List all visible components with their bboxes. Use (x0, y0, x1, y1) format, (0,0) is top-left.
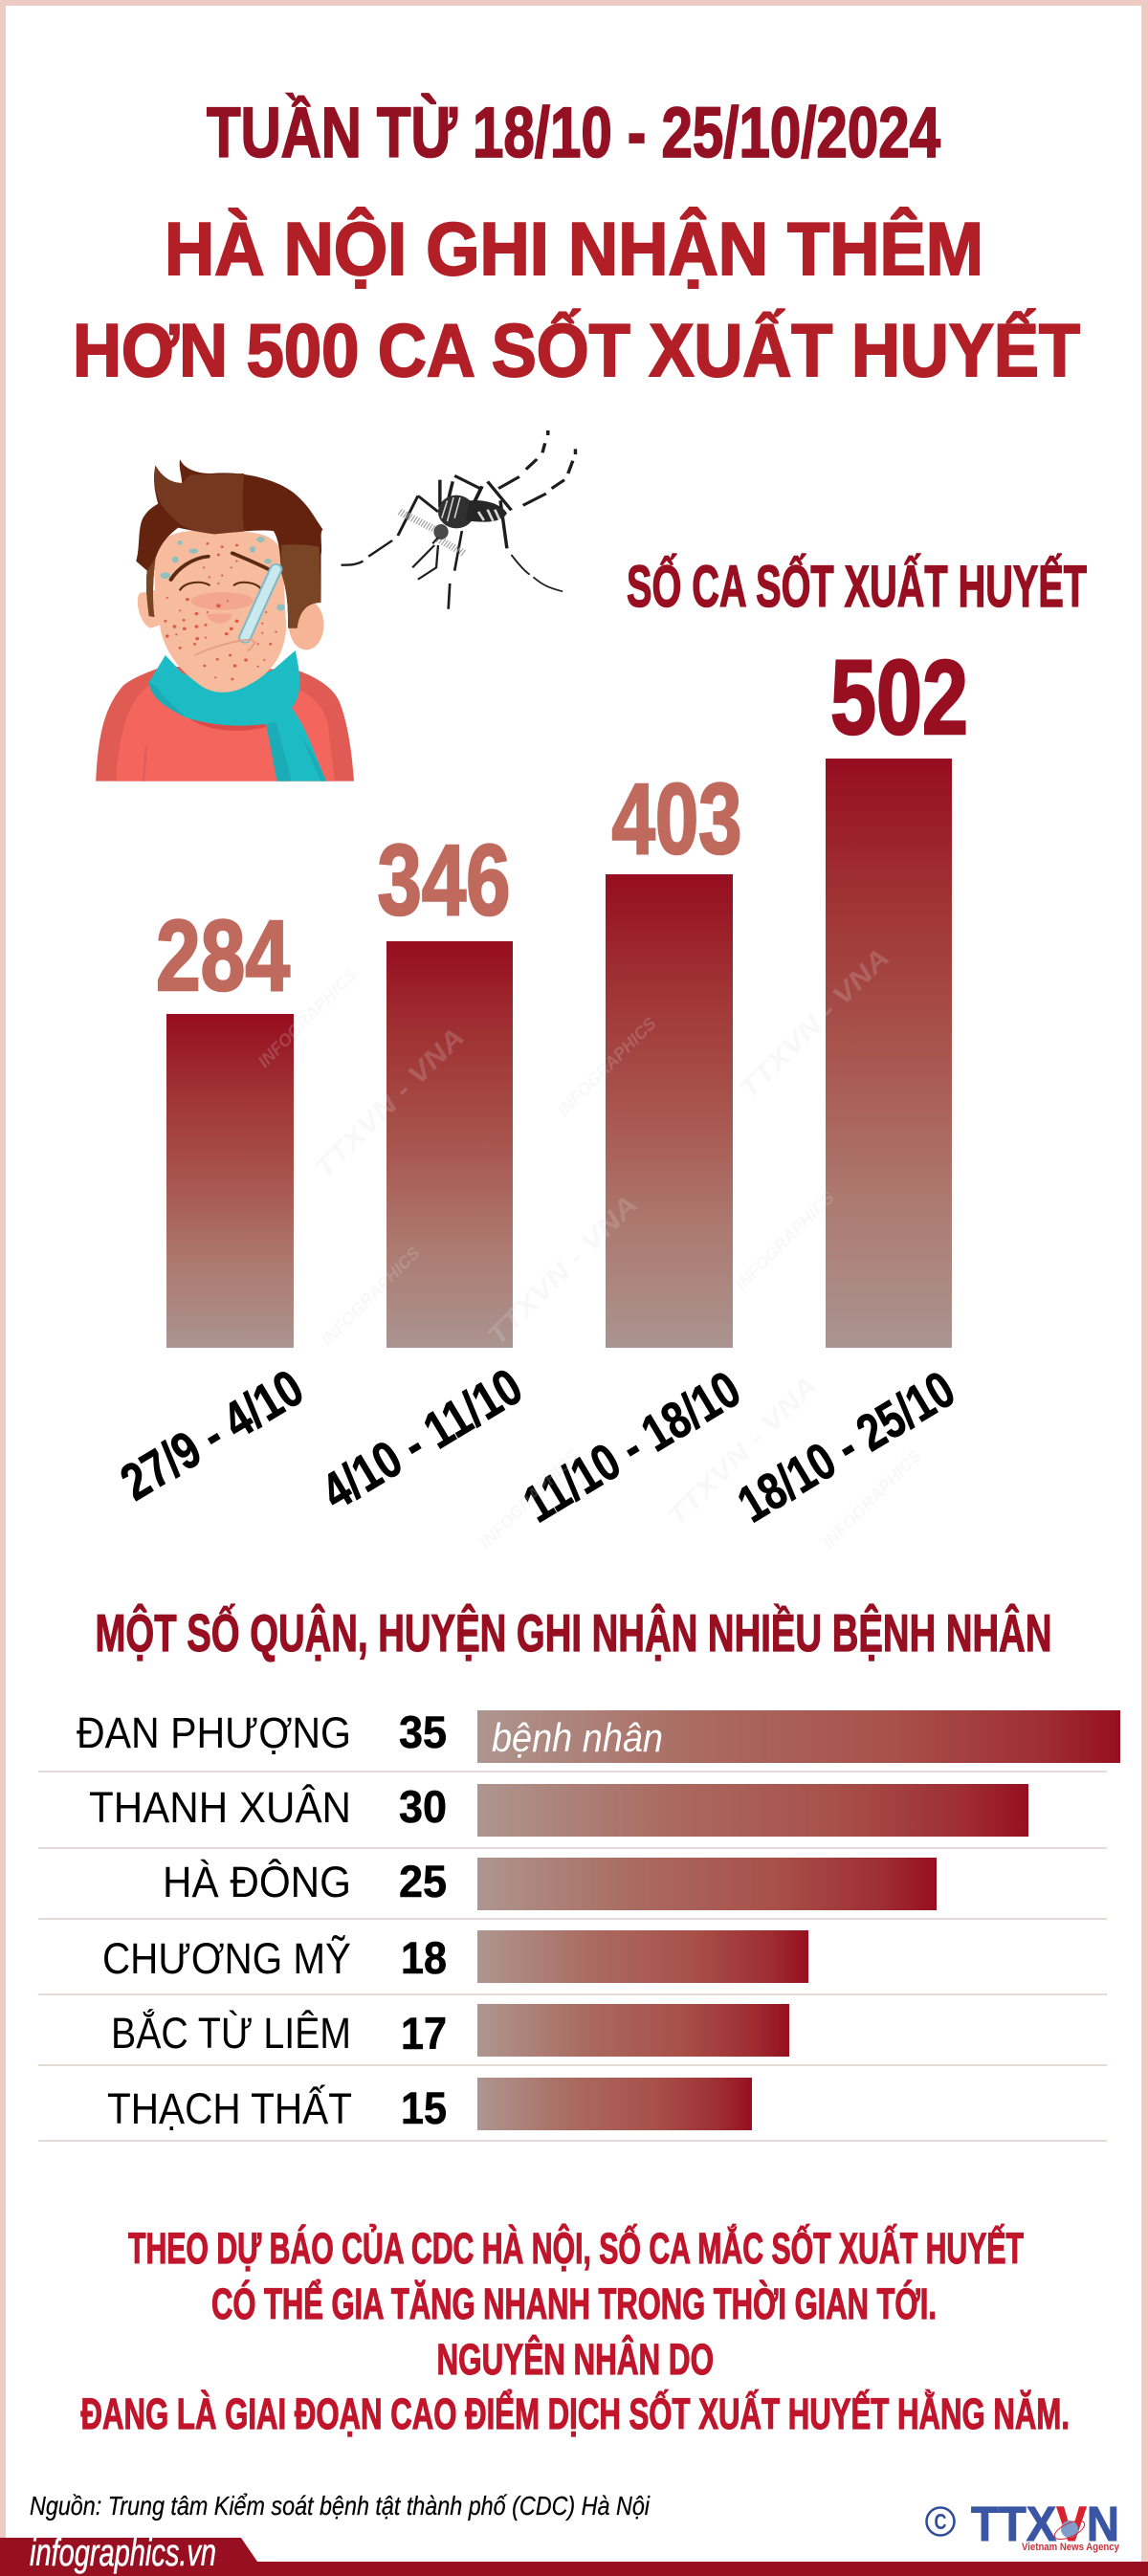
rotated week labels: 18/10 - 25/10 (728, 1360, 964, 1533)
footer band: infographics.vn (30, 2532, 216, 2574)
row: Bắc Từ Liêm: BẮC TỪ LIÊM (111, 2009, 351, 2058)
icon: mosquito (342, 430, 575, 609)
title: main headline (73, 207, 1080, 392)
district bar list (38, 1706, 1120, 2141)
row: Đan Phượng (77, 1706, 1120, 1763)
row: Bắc Từ Liêm: 17 (401, 2008, 447, 2059)
row: Bắc Từ Liêm (111, 2004, 789, 2059)
icon: sick man with thermometer (96, 459, 354, 782)
row: Hà Đông (163, 1856, 937, 1910)
watermarks: TTXVN - VNA (308, 1022, 470, 1183)
bar: 18/10 - 25/10 (826, 639, 968, 1348)
logo: TTXVN: C (934, 2509, 947, 2534)
logo: TTXVN: TTXVN (971, 2497, 1119, 2551)
rotated week labels: 27/9 - 4/10 (111, 1359, 313, 1511)
watermarks: INFOGRAPHICS (254, 965, 361, 1071)
row: Thạch Thất (107, 2078, 752, 2133)
bar: 18/10 - 25/10: 502 (830, 639, 968, 757)
watermarks: INFOGRAPHICS (819, 1446, 925, 1552)
row: Chương Mỹ: CHƯƠNG MỸ (102, 1934, 351, 1983)
row: Thạch Thất: 15 (401, 2082, 447, 2133)
title: main headline: HÀ NỘI GHI NHẬN THÊM (165, 207, 983, 291)
bar: 11/10 - 18/10: 403 (612, 763, 742, 875)
bar: 11/10 - 18/10 (606, 763, 742, 1348)
title: date range: TUẦN TỪ 18/10 - 25/10/2024 (207, 93, 940, 172)
bar: 27/9 - 4/10: 284 (156, 900, 290, 1012)
row: Thanh Xuân (89, 1781, 1028, 1837)
callout: CDC forecast text (80, 2224, 1070, 2438)
watermarks: INFOGRAPHICS (318, 1244, 424, 1350)
row: Chương Mỹ (102, 1930, 808, 1983)
row: Chương Mỹ: 18 (401, 1932, 447, 1983)
bar chart: weekly cases (156, 639, 968, 1348)
watermarks: INFOGRAPHICS (554, 1014, 660, 1120)
watermarks: TTXVN - VNA (733, 942, 894, 1104)
row: Thạch Thất: THẠCH THẤT (107, 2084, 352, 2133)
logo: TTXVN: Vietnam News Agency (1022, 2542, 1120, 2553)
watermarks: TTXVN - VNA (481, 1189, 643, 1351)
row: Đan Phượng: bệnh nhân (492, 1715, 663, 1760)
watermarks: INFOGRAPHICS (476, 1446, 583, 1552)
row: Đan Phượng: ĐAN PHƯỢNG (77, 1708, 351, 1757)
rotated week labels: 11/10 - 18/10 (514, 1360, 750, 1533)
bar: 4/10 - 11/10 (377, 825, 513, 1348)
watermarks: INFOGRAPHICS (732, 1188, 838, 1294)
callout: CDC forecast text: NGUYÊN NHÂN DO (436, 2335, 714, 2384)
rotated week labels: 4/10 - 11/10 (312, 1357, 532, 1521)
bar: 4/10 - 11/10: 346 (377, 825, 511, 936)
row: Hà Đông: 25 (399, 1856, 447, 1906)
bar: 27/9 - 4/10 (156, 900, 294, 1348)
watermarks: TTXVN - VNA (661, 1370, 823, 1531)
footer band (0, 2532, 1148, 2576)
row: Hà Đông: HÀ ĐÔNG (163, 1858, 351, 1906)
rotated week labels (111, 1357, 964, 1533)
row: Thanh Xuân: 30 (399, 1781, 447, 1832)
watermarks (254, 942, 925, 1552)
row: Thanh Xuân: THANH XUÂN (89, 1783, 351, 1832)
source note: Nguồn: Trung tâm Kiểm soát bệnh tật thành phố (CDC) Hà Nội (30, 2491, 651, 2521)
row: Đan Phượng: 35 (399, 1706, 447, 1757)
